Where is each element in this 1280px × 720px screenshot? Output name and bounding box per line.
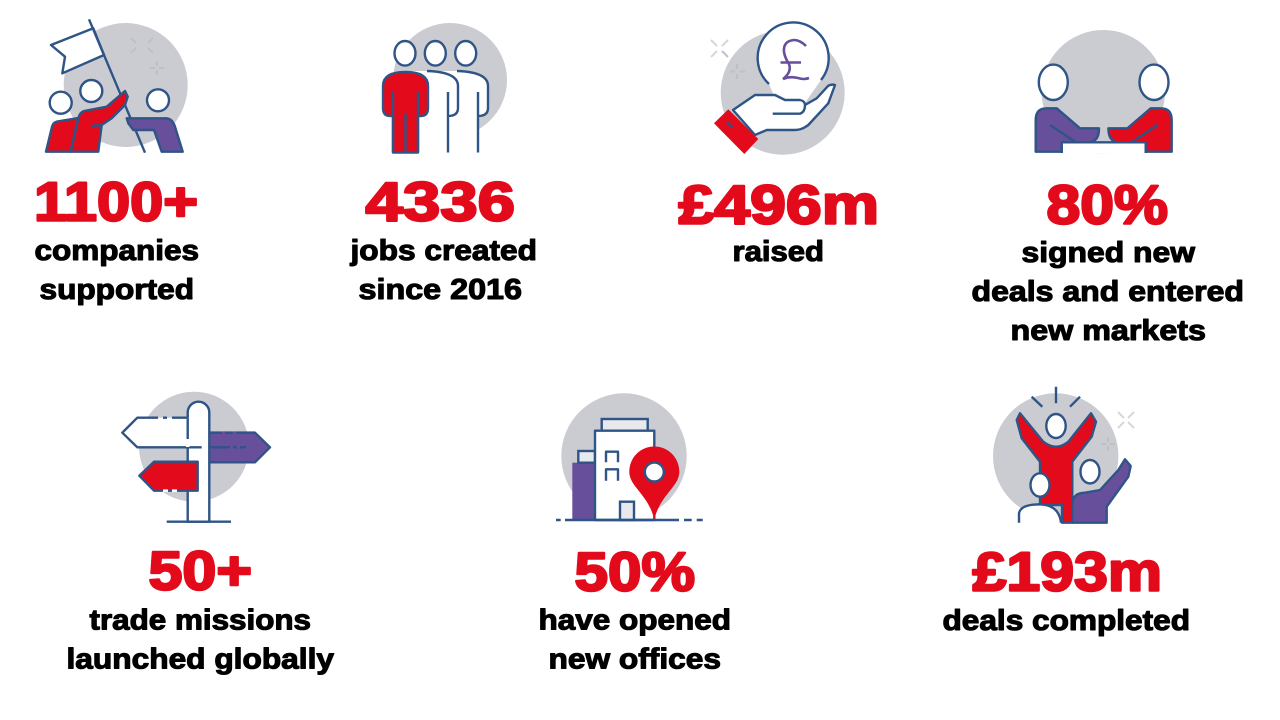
label: have opened new offices: new offices	[548, 644, 721, 676]
panel: trade missions	[66, 392, 334, 676]
label: signed new deals and entered new markets: deals and entered	[972, 276, 1244, 308]
icon: hand holding pound coin	[711, 22, 845, 155]
label: companies supported: supported	[40, 274, 194, 306]
number: 80%: 80%	[1046, 174, 1168, 236]
label: trade missions launched globally: trade missions	[90, 604, 311, 636]
label: signed new deals and entered new markets: new markets	[1010, 315, 1206, 347]
label: signed new deals and entered new markets	[972, 237, 1244, 347]
label: trade missions launched globally: launched globally	[66, 644, 334, 676]
label: raised: raised	[732, 236, 824, 268]
icon: two people at a table	[1036, 30, 1172, 153]
number: 50%: 50%	[574, 540, 695, 602]
panel: companies supported	[34, 19, 199, 306]
label: have opened new offices	[538, 604, 731, 676]
number: 50+: 50+	[148, 540, 252, 602]
label: jobs created since 2016	[349, 235, 537, 306]
label: have opened new offices: have opened	[538, 604, 731, 636]
icon: office building with map pin	[556, 393, 703, 520]
label: signed new deals and entered new markets: signed new	[1022, 237, 1196, 269]
number: £496m: £496m	[678, 174, 879, 236]
panel: deals completed	[942, 387, 1190, 637]
number: 1100+: 1100+	[34, 170, 198, 232]
icon: celebrating people	[993, 387, 1134, 523]
panel: jobs created	[349, 23, 537, 306]
label: jobs created since 2016: since 2016	[358, 274, 522, 306]
icon: signpost	[122, 392, 270, 522]
icon: pound symbol	[780, 40, 809, 79]
icon: three people	[383, 23, 507, 152]
panel: signed new deals	[972, 30, 1244, 347]
number: 4336: 4336	[366, 170, 515, 232]
icon: group raising a flag	[46, 19, 188, 153]
label: deals completed: deals completed	[942, 605, 1190, 637]
label: jobs created since 2016: jobs created	[349, 235, 537, 267]
label: companies supported: companies	[34, 235, 199, 267]
panel: new offices	[538, 393, 731, 676]
label: trade missions launched globally	[66, 604, 334, 676]
label: companies supported	[34, 235, 199, 306]
panel: raised	[678, 22, 879, 268]
number: £193m: £193m	[972, 540, 1162, 602]
